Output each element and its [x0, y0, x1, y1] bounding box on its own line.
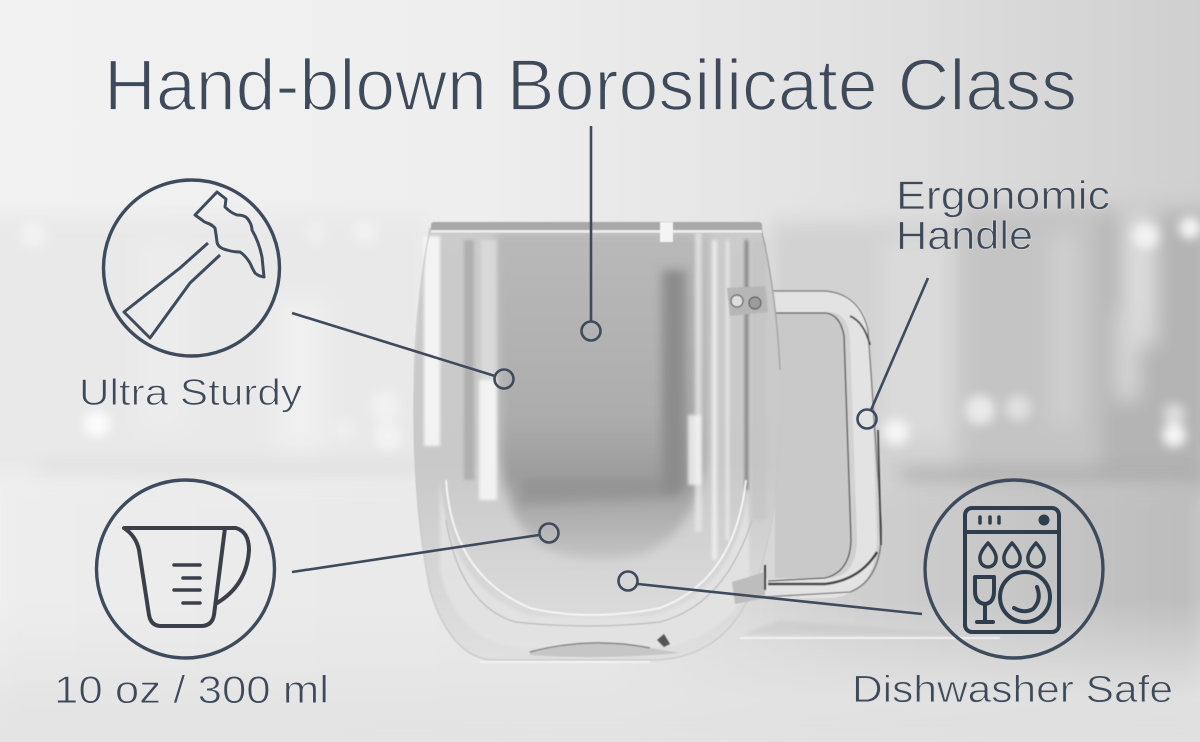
base	[480, 634, 680, 662]
icon: hammer in circle	[104, 180, 280, 356]
label: ergonomic handle: Ergonomic	[896, 174, 1110, 218]
label: dishwasher safe: Dishwasher Safe	[852, 669, 1173, 711]
connector: capacity	[292, 524, 558, 572]
dark reflection band in glass	[520, 270, 686, 505]
icon: measuring cup in circle	[96, 480, 274, 658]
handle joints	[727, 286, 768, 604]
icon: dishwasher in circle	[925, 480, 1103, 658]
handle	[762, 291, 881, 597]
connector: dishwasher	[618, 572, 922, 614]
glass mug photograph	[414, 222, 881, 662]
outline strokes	[414, 228, 780, 660]
connector: handle	[858, 278, 928, 428]
label: ergonomic handle	[896, 174, 1110, 258]
label: capacity: 10 oz / 300 ml	[54, 669, 329, 712]
lower double-wall bowl	[440, 480, 750, 648]
title: Hand-blown Borosilicate Class	[104, 46, 1077, 126]
inner chamber	[495, 232, 708, 559]
outer glass body	[414, 228, 780, 660]
vertical highlights	[424, 232, 766, 560]
connector: ultra sturdy	[292, 313, 514, 388]
label: ultra sturdy: Ultra Sturdy	[79, 371, 302, 413]
connector: title to glass	[582, 126, 600, 340]
rim	[431, 222, 762, 233]
label: ergonomic handle: Handle	[896, 214, 1033, 258]
